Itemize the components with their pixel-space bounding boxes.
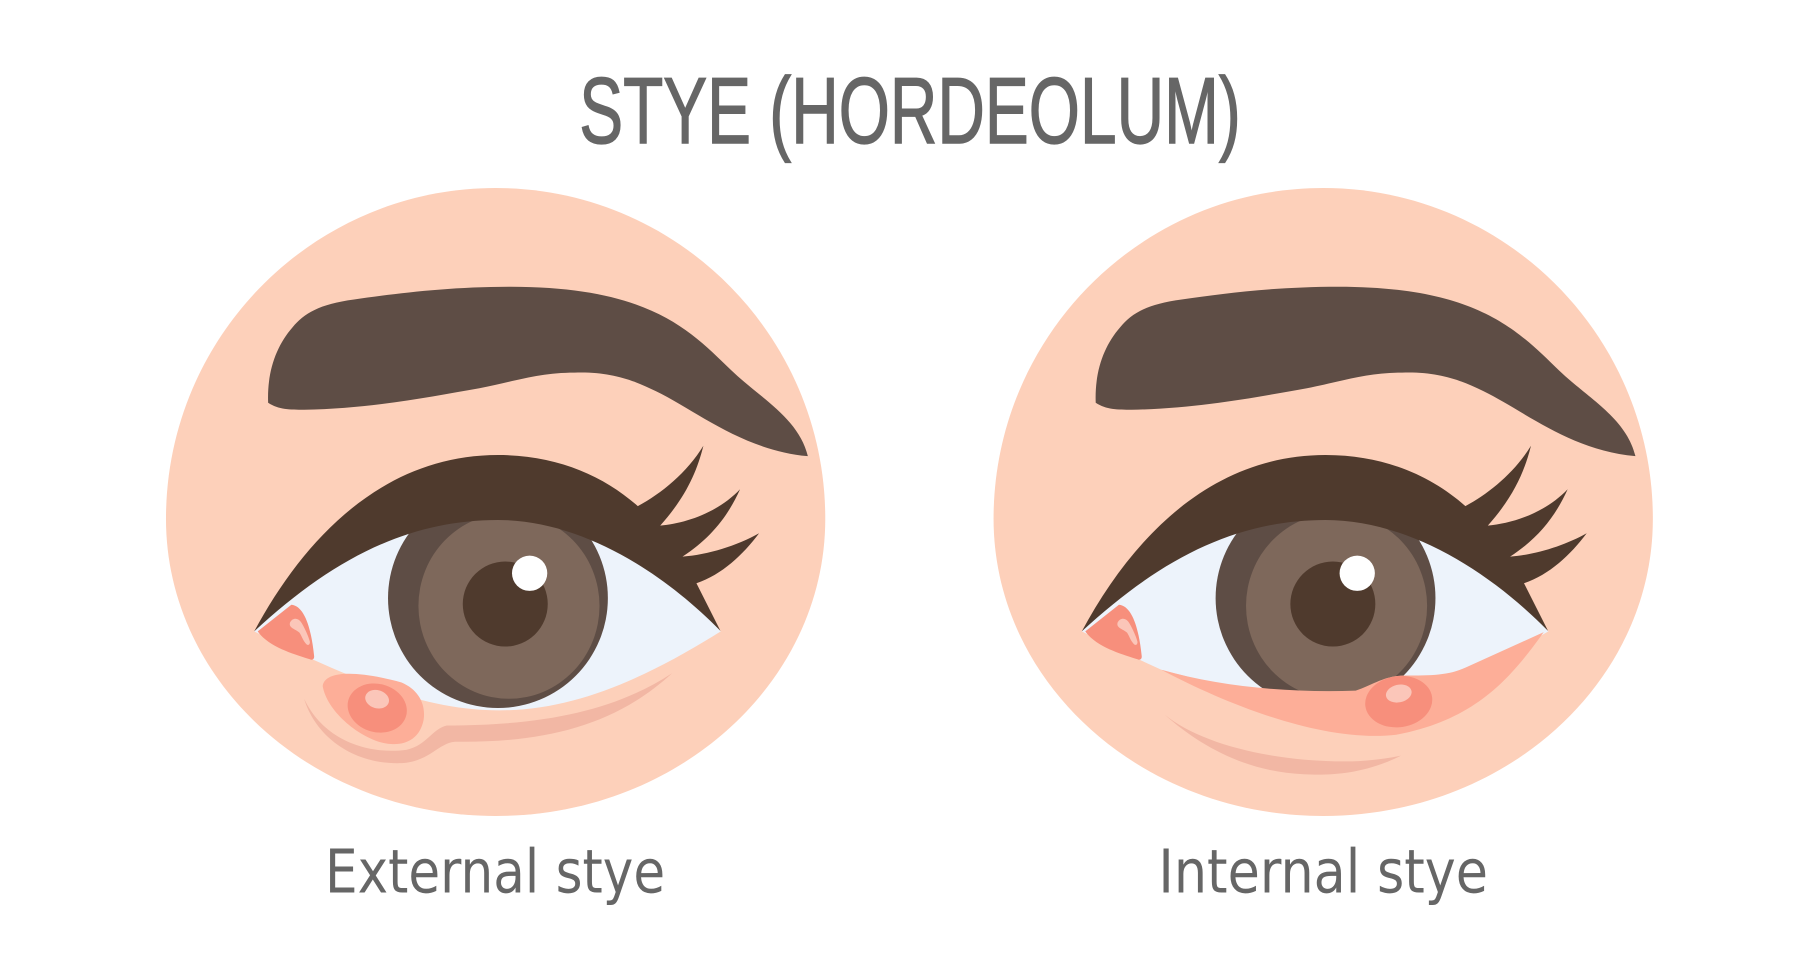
iris <box>1216 488 1435 708</box>
upper eyelid and lashes <box>254 446 759 631</box>
eyebrow <box>268 287 808 456</box>
iris <box>388 488 608 708</box>
title: STYE (HORDEOLUM) <box>579 59 1241 164</box>
pupil <box>1290 562 1375 647</box>
panel: internal stye <box>994 188 1653 816</box>
eye white <box>254 517 721 710</box>
eye white <box>1082 517 1548 696</box>
inner iris <box>1246 513 1427 699</box>
internal stye <box>1362 672 1436 732</box>
lower crease <box>1165 715 1401 775</box>
external stye <box>323 674 424 744</box>
tear duct <box>1085 605 1142 660</box>
pupil <box>463 562 548 647</box>
lower eyelid crease <box>304 673 672 763</box>
lower lid pink <box>1161 632 1544 736</box>
skin circle <box>994 188 1653 816</box>
label: external stye: External stye <box>325 838 665 908</box>
panel: external stye <box>166 188 825 816</box>
eyebrow <box>1096 287 1635 456</box>
highlight <box>512 556 547 591</box>
highlight <box>1340 556 1375 591</box>
skin circle <box>166 188 825 816</box>
upper eyelid and lashes <box>1082 446 1587 631</box>
tear duct <box>258 605 314 660</box>
inner iris <box>418 513 600 699</box>
label: internal stye: Internal stye <box>1158 838 1488 908</box>
